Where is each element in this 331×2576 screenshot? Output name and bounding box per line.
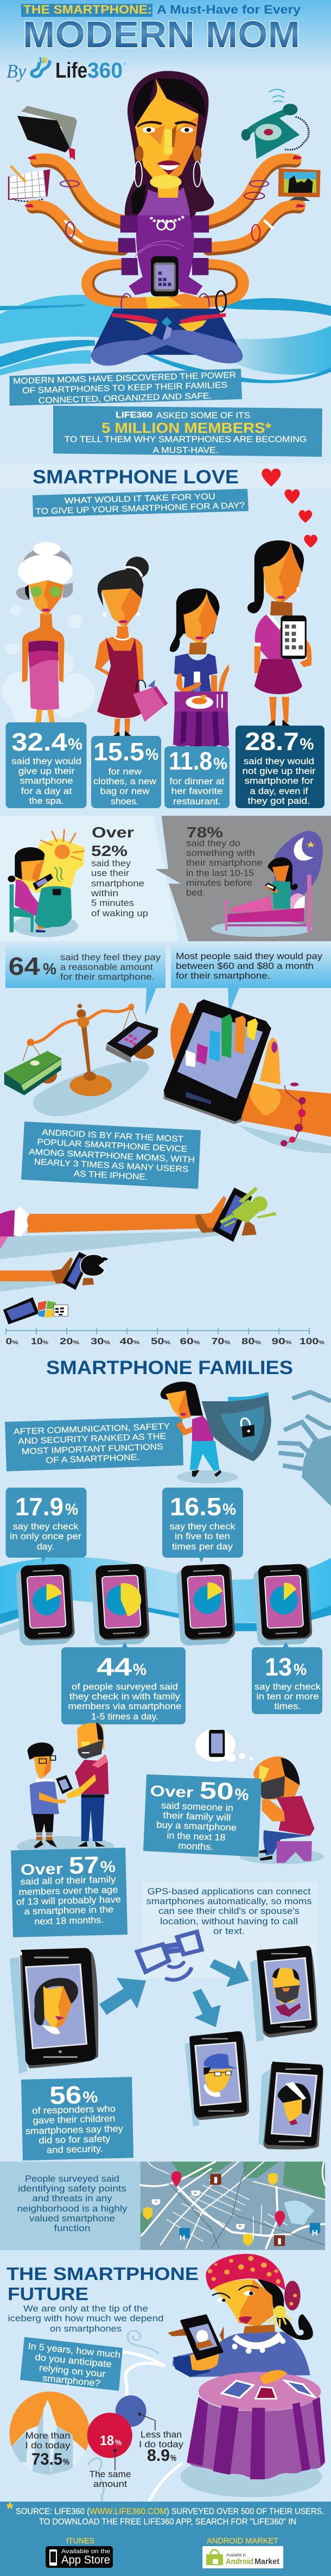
panel: 5 million members: ASKED SOME OF ITS xyxy=(156,411,250,420)
morning copy: use their xyxy=(91,868,129,878)
panel: GPS-based applications: GPS-based applications can connect xyxy=(148,1886,311,1897)
stat: 44%: % xyxy=(133,1661,147,1679)
bubble: less than today: 8.9 xyxy=(147,2446,170,2465)
callout: 64% reasonable amount: % xyxy=(43,960,56,978)
panel: question: WHAT WOULD IT TAKE FOR YOU xyxy=(65,492,215,506)
panel: Android most popular: AMONG SMARTPHONE MOMS, WITH xyxy=(29,1148,195,1164)
chart axis: percentage scale: 10 % xyxy=(31,1336,48,1346)
logo: By Life360: Life xyxy=(55,59,87,83)
panel: GPS-based applications: smartphones automatically, so moms xyxy=(147,1896,311,1906)
bubble: the same amount: 18 xyxy=(100,2433,114,2448)
phone: dad xyxy=(250,1946,317,2042)
panel: 5 million members: 5 MILLION MEMBERS* xyxy=(101,420,272,436)
panel: Over 57%: % xyxy=(100,1858,116,1876)
morning copy: 5 minutes xyxy=(91,898,134,908)
bubble: less than today: % xyxy=(170,2454,176,2463)
bubble: the same amount: The same xyxy=(89,2469,131,2479)
stat: 32.4%: the spa. xyxy=(29,796,64,806)
panel: Over 50%: 50 xyxy=(199,1777,234,1805)
chart: device popularity, arm bars xyxy=(0,1187,277,1292)
text block: tip of the iceberg xyxy=(8,2303,164,2334)
illustration: neighborhood safety map: 86 xyxy=(194,2192,197,2195)
illustration: woman holding smartphone xyxy=(247,540,311,726)
panel: five-year question: relying on your xyxy=(39,2363,106,2379)
panel: safety and security: AND SECURITY RANKED AS THE xyxy=(18,1432,166,1446)
panel: Android most popular: NEARLY 3 TIMES AS MANY USERS xyxy=(34,1157,189,1174)
illustration: woman with shield xyxy=(161,1382,271,1483)
panel: 56% safety: did so for safety xyxy=(39,2133,111,2146)
bubble: more than today: I do today xyxy=(25,2440,71,2451)
logo: By Life360: ° xyxy=(123,61,126,70)
bar: Android xyxy=(0,1187,277,1259)
chart axis: percentage scale: 60 % xyxy=(180,1336,200,1346)
source note xyxy=(7,2499,324,2527)
source note: SOURCE: LIFE360 ( xyxy=(16,2507,90,2516)
stat: 32.4%: 32.4 xyxy=(11,728,67,756)
icon: notebook xyxy=(17,106,77,160)
stat: 32.4% xyxy=(5,722,87,808)
panel: neighborhood safety text: and threats in any xyxy=(33,2193,112,2203)
stat: 17.9%: % xyxy=(65,1501,78,1519)
map pins xyxy=(171,2171,285,2227)
morning copy: said they xyxy=(91,858,131,868)
stat: 15.5%: for new xyxy=(109,766,142,777)
panel: Over 50%: in the next 18 xyxy=(167,1830,226,1843)
stat: 11.8% xyxy=(164,746,230,808)
illustration: spa bubbles xyxy=(2,605,95,728)
icon: hearts xyxy=(262,469,317,547)
title block: A Must-Have for Every xyxy=(157,3,301,16)
bedtime copy: their smartphone xyxy=(186,858,263,868)
morning headline: Over xyxy=(92,824,134,841)
footer: source and app links xyxy=(0,2499,331,2576)
phones with family faces xyxy=(10,1946,323,2150)
chart axis: percentage scale: 20 % xyxy=(60,1336,79,1346)
stat: 44%: 1-5 times a day. xyxy=(91,1711,158,1722)
stat: 28.7%: % xyxy=(300,735,314,753)
phone pie 2 xyxy=(91,1564,150,1646)
callout: 64% reasonable amount: for their smartphone. xyxy=(60,972,155,982)
illustration: balance scale with cash and phone xyxy=(4,1004,158,1116)
bubble: more than today: More than xyxy=(25,2430,71,2441)
panel: Over 57%: said all of their family xyxy=(20,1874,116,1887)
chart axis: percentage scale: 30 % xyxy=(91,1336,110,1346)
iTunes badge xyxy=(46,2536,113,2568)
stat: 44%: 44 xyxy=(97,1653,132,1681)
stat: 15.5%: shoes. xyxy=(111,796,139,807)
panel: Over 50%: said someone in xyxy=(161,1800,233,1813)
stat: 16.5%: in five to ten xyxy=(175,1531,230,1541)
stat: 11.8%: 11.8 xyxy=(169,747,212,775)
heading: The Smartphone Future: FUTURE xyxy=(8,2284,88,2304)
panel: Over 57% xyxy=(11,1848,128,1937)
panel: neighborhood safety text: function xyxy=(54,2223,90,2233)
stat: 28.7%: 28.7 xyxy=(245,727,299,755)
bedtime copy xyxy=(186,838,263,898)
illustration: hand holding phone with bar chart xyxy=(163,999,331,1153)
panel: Over 57%: a smartphone in the xyxy=(24,1904,114,1917)
panel: intro statement: OF SMARTPHONES TO KEEP THEIR FAMILIES xyxy=(22,381,227,395)
stat: 16.5% xyxy=(162,1488,243,1563)
stat: 15.5%: % xyxy=(145,746,158,764)
background waves xyxy=(0,295,331,383)
stat: 28.7%: smartphone for xyxy=(244,776,314,786)
icon: family photo frame xyxy=(278,168,321,201)
panel: 5 million members: LIFE360 xyxy=(116,411,152,420)
chart: reliance in five years xyxy=(9,2391,184,2489)
panel: Over 50%: % xyxy=(234,1786,249,1804)
stat: 32.4%: smartphone xyxy=(20,776,73,786)
icon: rotary telephone xyxy=(241,89,309,159)
panel: 56% safety: and security. xyxy=(47,2144,103,2155)
bubble: less than today: I do today xyxy=(139,2439,184,2449)
callout: $60 to $80 a month: between $60 and $80 a month xyxy=(176,961,314,971)
callout: $60 to $80 a month: Most people said they would pay xyxy=(176,951,323,961)
panel: intro statement: CONNECTED, ORGANIZED AND SAFE. xyxy=(38,392,212,405)
panel: 5 million members: A MUST-HAVE. xyxy=(153,446,218,455)
panel: neighborhood safety text: neighborhood is a highly xyxy=(17,2203,128,2214)
callout: 64% reasonable amount: 64 xyxy=(9,952,40,980)
heading band xyxy=(0,463,331,489)
stat: 32.4%: give up their xyxy=(18,766,75,776)
panel: five-year question: do you anticipate xyxy=(35,2352,112,2370)
header sky gradient xyxy=(0,0,331,73)
panel: Over 57%: 57 xyxy=(68,1852,99,1879)
phone: son xyxy=(184,2031,249,2126)
hair xyxy=(125,71,214,226)
illustration: neighborhood safety map: H xyxy=(312,2228,317,2238)
panel: question: TO GIVE UP YOUR SMARTPHONE FOR A DAY? xyxy=(35,501,245,517)
stat: 13%: in ten or more xyxy=(256,1691,319,1702)
callout: $60 to $80 a month xyxy=(171,944,331,1013)
illustration: neighborhood safety map: H xyxy=(180,2233,185,2243)
illustration: multi-armed modern mom xyxy=(8,71,321,366)
illustration: woman at the spa xyxy=(16,542,73,726)
title block: THE SMARTPHONE: xyxy=(23,3,152,16)
panel: GPS-based applications xyxy=(141,1882,317,1979)
panel: Over 57%: next 18 months. xyxy=(34,1914,104,1927)
callout: 64% reasonable amount xyxy=(5,944,166,1016)
panel: intro statement xyxy=(10,369,242,406)
decorative smoke swirls xyxy=(69,2331,182,2536)
bubble: the same amount: % xyxy=(115,2438,122,2447)
chart axis: percentage scale: 70 % xyxy=(212,1336,231,1346)
stat: 11.8%: % xyxy=(213,755,227,773)
logo: By Life360 xyxy=(7,58,126,83)
panel: 56% safety: of responders who xyxy=(32,2103,116,2116)
illustration: fortune teller with smartphone xyxy=(168,2254,325,2497)
chart axis: percentage scale: 50 % xyxy=(151,1336,170,1346)
fire extinguisher signs xyxy=(210,2174,221,2185)
panel: Over 57%: members over the age xyxy=(18,1885,118,1897)
bubble: the same amount xyxy=(87,2413,132,2489)
panel: 56% safety: 56 xyxy=(49,2081,82,2109)
stat: 44%: of people surveyed said xyxy=(72,1681,178,1692)
logo: By Life360: 360 xyxy=(87,59,123,83)
chart axis: percentage scale xyxy=(5,1328,324,1346)
Android Market badge: Android xyxy=(226,2557,253,2566)
panel: Over 57%: of 13 will probably have xyxy=(16,1894,121,1907)
panel: 56% safety: gave their children xyxy=(33,2113,116,2126)
stat: 32.4%: said they would xyxy=(11,756,81,766)
panel: Over 57%: Over xyxy=(21,1860,63,1878)
callout: $60 to $80 a month: for their smartphone. xyxy=(176,971,270,981)
panel: 5 million members xyxy=(53,406,322,457)
panel: safety and security: OF A SMARTPHONE. xyxy=(46,1453,140,1465)
highway markers xyxy=(151,2190,245,2230)
stat: 16.5%: say they check xyxy=(169,1521,235,1532)
chart axis: percentage scale: 0% xyxy=(5,1336,18,1346)
text block: tip of the iceberg: We are only at the tip of the xyxy=(23,2303,148,2314)
fingertips xyxy=(24,155,305,207)
bar: iPhone xyxy=(0,1252,108,1292)
callout: 64% reasonable amount: a reasonable amount xyxy=(60,962,153,972)
panel: morning usage xyxy=(0,816,179,941)
panel: morning usage: 52% xyxy=(91,842,128,859)
phone pie 3 xyxy=(176,1564,235,1646)
stat: 13%: say they check xyxy=(254,1681,321,1692)
morning copy: within xyxy=(91,888,118,898)
illustration: woman at dinner xyxy=(170,588,229,748)
stat: 28.7%: said they would xyxy=(244,756,314,766)
stat: 17.9% xyxy=(5,1488,87,1563)
bedtime copy: minutes before xyxy=(186,878,252,888)
chart axis: percentage scale: 100 % xyxy=(300,1336,324,1346)
panel: Over 50% xyxy=(143,1774,262,1857)
Android Market badge: ANDROID MARKET xyxy=(207,2536,278,2546)
source note: * xyxy=(7,2499,14,2518)
source note: ) SURVEYED OVER 500 OF THEIR USERS. xyxy=(167,2507,324,2516)
stat: 17.9%: 17.9 xyxy=(15,1492,63,1521)
face xyxy=(135,78,199,185)
panel: Over 50%: months. xyxy=(178,1841,214,1852)
morning illustration xyxy=(8,829,85,937)
title block: MODERN MOM xyxy=(23,14,300,55)
chart axis: percentage scale: 80 % xyxy=(241,1336,261,1346)
bedtime copy: said they do xyxy=(186,838,240,848)
necklace xyxy=(151,216,183,230)
heading: The Smartphone Future xyxy=(7,2264,199,2304)
bedtime copy: something with xyxy=(186,848,255,858)
panel: GPS-based applications: or text. xyxy=(213,1926,245,1936)
panel: five-year question: smartphone? xyxy=(42,2373,101,2389)
icon: calendar planner xyxy=(8,166,50,201)
panel: intro statement: MODERN MOMS HAVE DISCOVERED THE POWER xyxy=(13,370,236,386)
heading: Smartphone Love: SMARTPHONE LOVE xyxy=(33,467,239,488)
panel: neighborhood safety text: People surveyed said xyxy=(25,2174,119,2184)
stat: 15.5%: clothes, a new xyxy=(93,776,157,786)
illustration: thinking father with thought bubble xyxy=(195,1729,324,1864)
chart: pie charts on phones xyxy=(16,1564,313,1646)
stat: 16.5%: 16.5 xyxy=(170,1492,221,1521)
panel: 56% safety: smartphones say they xyxy=(26,2124,124,2136)
chart axis: percentage scale: 40 % xyxy=(119,1336,140,1346)
bubble: less than today xyxy=(116,2395,184,2465)
phone pie 1 xyxy=(16,1564,75,1646)
stat: 17.9%: day. xyxy=(37,1541,54,1552)
panel: Android most popular xyxy=(21,1122,201,1189)
stat: 15.5% xyxy=(91,736,161,808)
bubble: more than today xyxy=(9,2391,90,2477)
stat: 28.7%: a day, even if xyxy=(250,786,308,796)
panel: Android most popular: POPULAR SMARTPHONE DEVICE xyxy=(37,1137,188,1154)
centre smartphone xyxy=(151,256,179,297)
panel: safety and security: AFTER COMMUNICATION, SAFETY xyxy=(14,1422,170,1437)
panel: Android most popular: AS THE IPHONE. xyxy=(73,1169,148,1182)
panel: Over 50%: Over xyxy=(150,1783,194,1801)
panel: question xyxy=(33,489,249,517)
panel: 5 million members: TO TELL THEM WHY SMARTPHONES ARE BECOMING xyxy=(64,435,307,444)
source note: TO DOWNLOAD THE FREE LIFE360 APP, SEARCH FOR "LIFE360" IN xyxy=(39,2517,296,2527)
stat: 13%: 13 xyxy=(265,1653,292,1681)
panel: 56% safety: % xyxy=(82,2088,98,2107)
panel: GPS-based applications: can see their child's or spouse's xyxy=(158,1906,300,1916)
panel: safety and security xyxy=(5,1416,183,1471)
bedtime headline: 78% xyxy=(187,824,223,841)
iTunes badge: ITUNES xyxy=(66,2536,94,2546)
wavy band behind phones xyxy=(0,1557,331,1636)
panel: GPS-based applications: location, without having to call xyxy=(160,1916,298,1926)
phone pie 4 xyxy=(253,1564,313,1646)
callout: 64% reasonable amount: said they feel they pay xyxy=(60,952,161,962)
legs xyxy=(91,308,243,355)
illustration: woman shopping xyxy=(95,557,168,737)
arrows: GPS connections xyxy=(99,1959,249,2027)
neck and torso xyxy=(136,216,194,289)
morning copy: of waking up xyxy=(91,908,148,918)
stat: 16.5%: times per day xyxy=(172,1541,233,1552)
illustration: father handing phone to son xyxy=(17,1723,114,1857)
stat: 16.5%: % xyxy=(222,1501,236,1519)
bedtime copy: bed. xyxy=(186,887,205,898)
text block: tip of the iceberg: iceberg with how much we depend xyxy=(8,2313,164,2323)
stat: 32.4%: % xyxy=(68,735,82,753)
Android Market badge: Available in xyxy=(226,2553,246,2558)
stat: 13%: times. xyxy=(275,1701,301,1711)
panel: bedtime usage xyxy=(155,816,331,941)
lap hands and sleeves xyxy=(129,273,202,295)
phone: mom xyxy=(10,1948,98,2074)
logo: By Life360: By xyxy=(7,60,26,82)
stat: 17.9%: say they check xyxy=(13,1521,79,1532)
stat: 17.9%: in only once per xyxy=(10,1531,81,1541)
heading: Smartphone Families: SMARTPHONE FAMILIES xyxy=(46,1357,293,1378)
bedtime copy: in the last 10-15 xyxy=(186,868,254,878)
stat: 28.7%: not give up their xyxy=(242,766,316,776)
text block: tip of the iceberg: on smartphones xyxy=(50,2323,122,2334)
heading: The Smartphone Future: THE SMARTPHONE xyxy=(7,2264,199,2284)
panel: five-year question xyxy=(20,2337,123,2391)
panel: safety and security: MOST IMPORTANT FUNCTIONS xyxy=(22,1442,163,1457)
chart axis: percentage scale: 90 % xyxy=(271,1336,292,1346)
stat: 44%: members via smartphone xyxy=(68,1701,181,1711)
panel: five-year question: In 5 years, how much xyxy=(28,2341,121,2360)
bracelets xyxy=(60,181,269,314)
illustration: neighborhood safety map xyxy=(141,2162,325,2250)
stat: 13% xyxy=(252,1642,322,1714)
bedtime illustration xyxy=(211,831,323,937)
hospital signs xyxy=(180,2228,190,2238)
phone: daughter xyxy=(259,2062,323,2150)
bubble: more than today: 73.5 xyxy=(31,2449,62,2468)
panel: Android most popular: ANDROID IS BY FAR THE MOST xyxy=(42,1128,184,1144)
stat: 11.8%: for dinner at xyxy=(169,776,225,786)
panel: neighborhood safety text: identifying safety points xyxy=(18,2183,126,2194)
iTunes badge: Available on the xyxy=(61,2548,110,2555)
stat: 13%: % xyxy=(294,1661,307,1679)
stat: 28.7%: they got paid. xyxy=(247,796,310,806)
raised arms xyxy=(31,159,300,303)
Android Market badge: Market xyxy=(254,2557,279,2566)
bar: Windows and BlackBerry phones xyxy=(3,1297,68,1324)
stat: 28.7% xyxy=(235,726,324,808)
stat: 32.4%: for a day at xyxy=(21,786,72,796)
illustration: threatening shadow hand xyxy=(278,1392,331,1506)
stat: 44% xyxy=(61,1642,186,1724)
stat: 11.8%: restaurant. xyxy=(173,796,221,807)
safety shields xyxy=(143,2173,278,2246)
panel: neighborhood safety text xyxy=(0,2162,141,2250)
stat: 44%: they check in with family xyxy=(69,1691,181,1702)
bubble: the same amount: amount xyxy=(93,2479,127,2489)
illustration: GPS satellite xyxy=(137,1932,201,1980)
source note: WWW.LIFE360.COM xyxy=(90,2507,167,2516)
stat: 15.5%: 15.5 xyxy=(93,738,144,766)
bubble: more than today: % xyxy=(63,2458,69,2467)
panel: neighborhood safety text: valued smartphone xyxy=(29,2213,115,2224)
Android Market badge xyxy=(202,2536,283,2568)
stat: 11.8%: her favorite xyxy=(171,786,222,796)
bubble: less than today: Less than xyxy=(141,2429,182,2440)
morning copy xyxy=(91,858,148,918)
iTunes badge: App Store xyxy=(61,2554,110,2566)
panel: 56% safety xyxy=(21,2077,133,2161)
illustration: neighborhood safety map: 86 xyxy=(239,2225,241,2228)
panel: Over 50%: their family will xyxy=(163,1810,231,1823)
stat: 15.5%: bag or new xyxy=(100,786,150,796)
illustration: neighborhood safety map: 74 xyxy=(155,2201,157,2204)
panel: Over 50%: buy a smartphone xyxy=(156,1819,237,1833)
morning copy: smartphone xyxy=(91,878,144,889)
